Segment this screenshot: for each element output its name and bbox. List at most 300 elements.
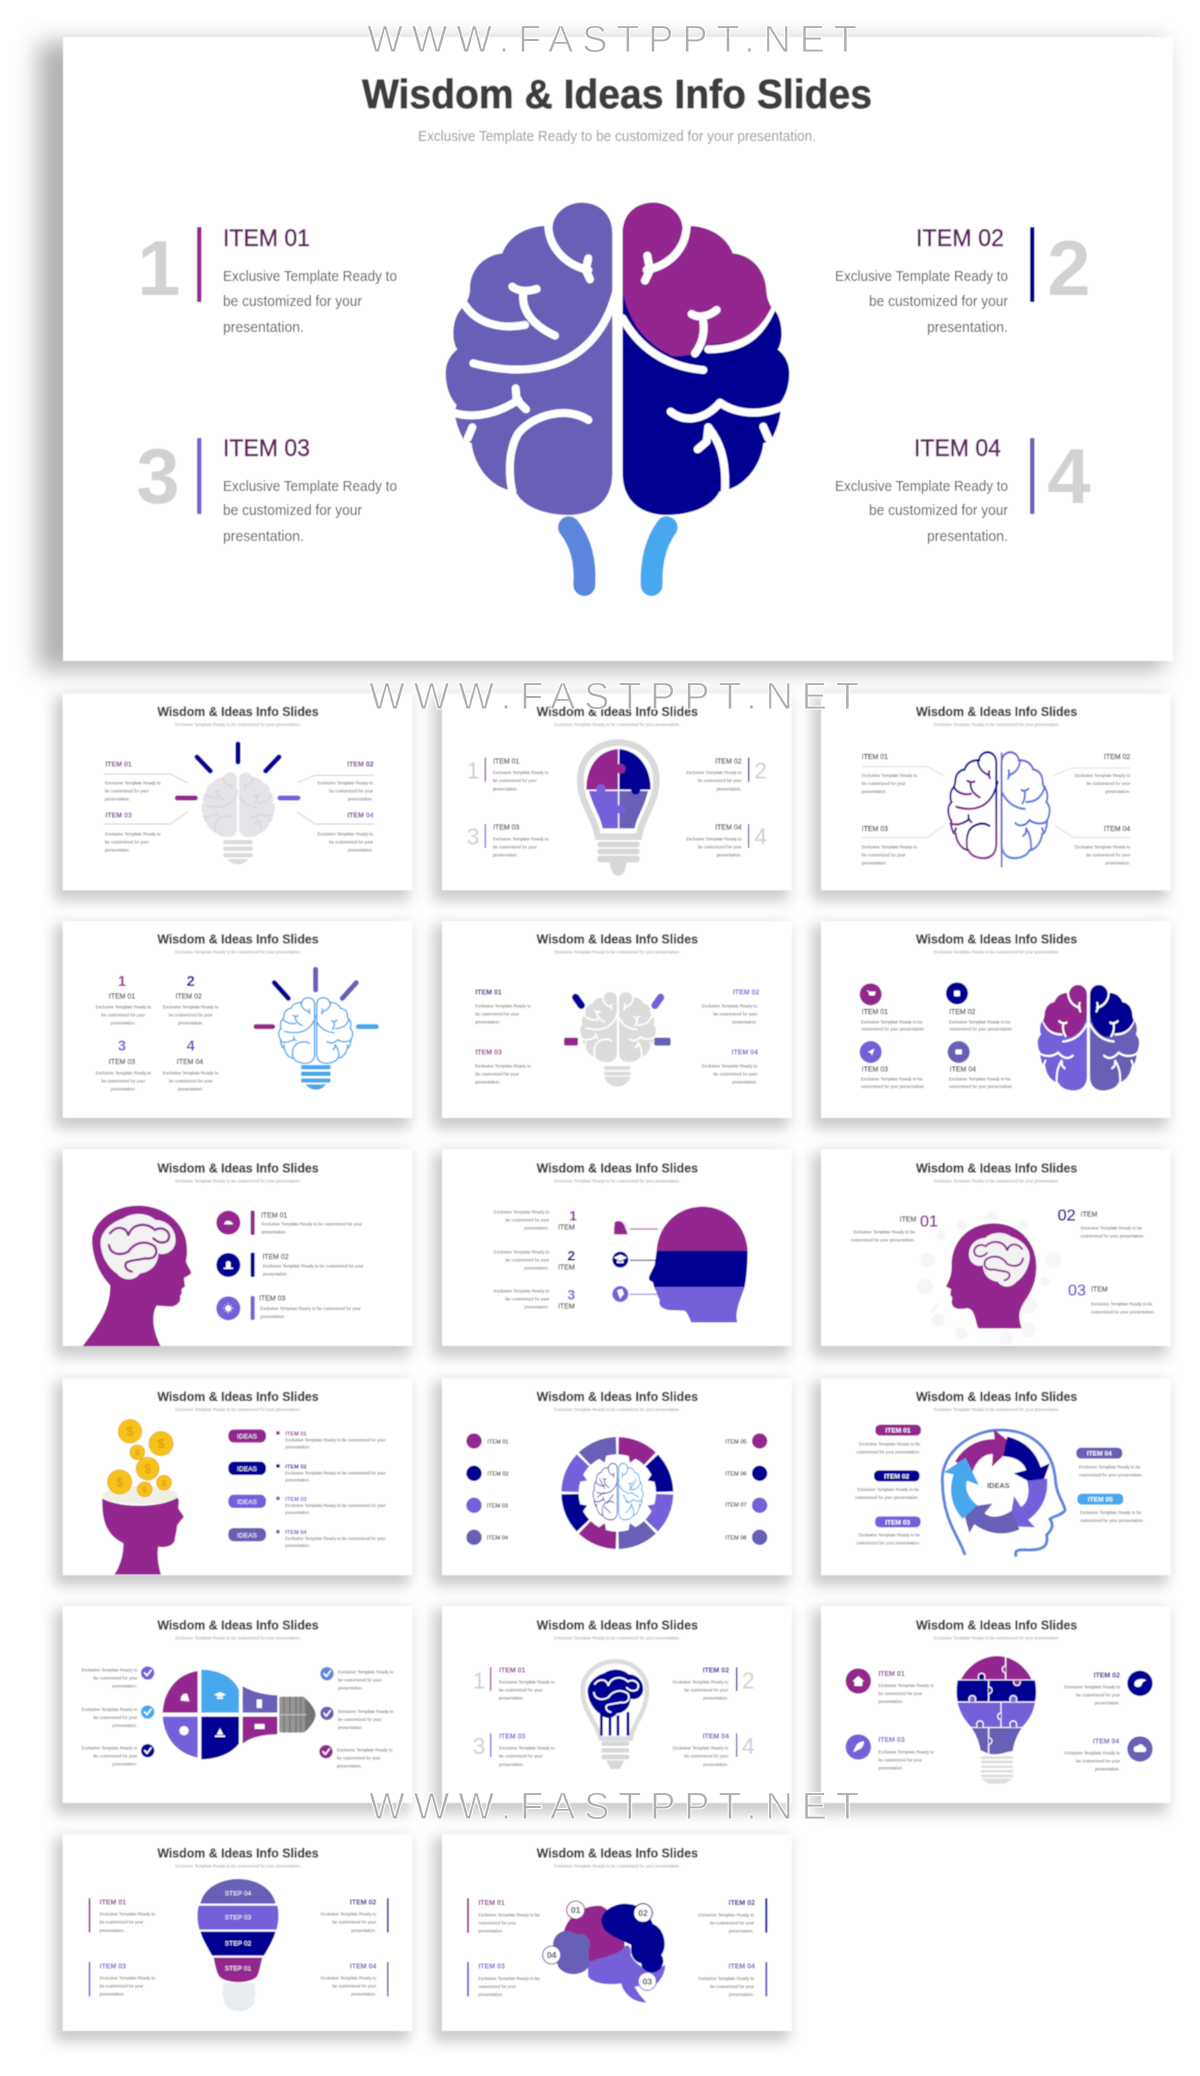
item texts: presentation. <box>100 1991 125 1996</box>
panel: slide 13 sideways bulb: Wisdom & Ideas Info Slides <box>157 1617 319 1632</box>
item 02: ITEM 02 <box>262 1254 289 1261</box>
panel: slide 6 colour brain: Exclusive Template Ready to be customized for your presentation. <box>934 950 1059 955</box>
item texts: be customized for your <box>169 1013 213 1018</box>
item texts: 02 <box>1058 1208 1076 1225</box>
icons and item texts: ITEM 01 <box>862 1009 888 1016</box>
item 03: be customized for your <box>223 503 362 519</box>
item texts: be customized for your <box>100 1983 144 1988</box>
panel: main slide <box>63 37 1173 661</box>
item 02: be customized for your <box>869 294 1008 310</box>
icon: four lobe brain: 03 <box>642 1976 652 1986</box>
item texts: 2 <box>742 1667 755 1693</box>
item texts: 3 <box>118 1039 126 1055</box>
item texts: Exclusive Template Ready to <box>686 770 742 775</box>
item texts: be customized for your <box>862 853 906 858</box>
item texts: ITEM 03 <box>499 1734 526 1741</box>
item texts: Exclusive Template Ready to be <box>853 1230 916 1235</box>
check list left: presentation. <box>112 1684 137 1689</box>
panel: slide 11 ring brain <box>442 1378 792 1575</box>
check list right: be customized for your <box>337 1755 381 1760</box>
item texts: Exclusive Template Ready to <box>686 836 742 841</box>
idea list: presentation. <box>285 1510 310 1515</box>
item 04: Exclusive Template Ready to <box>835 479 1008 495</box>
legend right <box>725 1433 767 1545</box>
item texts: presentation. <box>703 1696 728 1701</box>
icons and item texts: customized for your presentation. <box>949 1027 1013 1032</box>
item list right: customized for your presentation. <box>1080 1518 1144 1523</box>
item texts: be customized for your <box>100 1920 144 1925</box>
item 02 <box>1064 1671 1153 1705</box>
item texts: Exclusive Template Ready to <box>105 780 161 785</box>
item texts: be customized for your <box>685 1687 729 1692</box>
panel: slide 15 puzzle bulb with icons <box>821 1606 1171 1803</box>
item 04: be customized for your <box>869 503 1008 519</box>
item texts: presentation. <box>729 1992 754 1997</box>
item texts: presentation. <box>478 1992 503 1997</box>
item texts: Exclusive Template Ready to <box>321 1912 377 1917</box>
item 03: presentation. <box>878 1765 903 1770</box>
panel: slide 13 sideways bulb <box>63 1606 413 1803</box>
check list left: presentation. <box>112 1723 137 1728</box>
item texts: be customized for your <box>499 1754 543 1759</box>
icon: grey brain with rays <box>564 992 671 1087</box>
item 01: presentation. <box>223 320 304 336</box>
item 01: 1 <box>137 224 181 312</box>
panel: slide 14 circuit brain bulb <box>442 1606 792 1803</box>
item texts: ITEM <box>1081 1211 1098 1218</box>
item texts: ITEM 02 <box>350 1900 376 1907</box>
item 04: 4 <box>1047 432 1091 520</box>
item texts: 3 <box>473 1733 485 1759</box>
item texts: presentation. <box>703 1762 728 1767</box>
idea list: IDEAS <box>237 1434 258 1441</box>
item texts: ITEM <box>558 1303 575 1310</box>
idea list: Exclusive Template Ready to be customized for your <box>285 1536 386 1541</box>
check list left <box>82 1666 154 1767</box>
icon: outline brain <box>948 752 1050 867</box>
item list left: ITEM 02 <box>884 1473 910 1480</box>
item texts: ITEM 01 <box>862 754 888 761</box>
item texts: presentation. <box>717 786 742 791</box>
item texts: Exclusive Template Ready to <box>494 1209 550 1214</box>
item texts: ITEM 04 <box>177 1059 203 1066</box>
item texts: Exclusive Template Ready to <box>862 773 918 778</box>
faint background icons <box>917 1210 1061 1345</box>
icons and item texts: Exclusive Template Ready to be <box>949 1077 1011 1082</box>
check list left: Exclusive Template Ready to <box>82 1746 138 1751</box>
item texts: ITEM 02 <box>715 758 742 765</box>
item 02: presentation. <box>263 1271 288 1276</box>
idea list: presentation. <box>285 1543 310 1548</box>
item texts: be customized for your <box>714 1071 758 1076</box>
item 03: ITEM 03 <box>223 435 310 462</box>
check list right: be customized for your <box>338 1717 382 1722</box>
ring inward pointers <box>580 1455 655 1531</box>
item texts: ITEM 01 <box>499 1668 526 1675</box>
item texts: ITEM <box>900 1217 917 1224</box>
icons and item texts: Exclusive Template Ready to be <box>949 1019 1011 1024</box>
icon: four lobe brain: 02 <box>638 1908 648 1918</box>
panel: slide 16 step bulb <box>63 1834 413 2031</box>
item 03 <box>136 432 397 545</box>
item texts: Exclusive Template Ready to <box>673 1679 729 1684</box>
item 03: Exclusive Template Ready to <box>223 479 397 495</box>
item texts: presentation. <box>348 847 373 852</box>
item texts: ITEM <box>1091 1286 1108 1293</box>
subtitle: Exclusive Template Ready to be customized for your presentation. <box>418 128 816 145</box>
item texts: ITEM 04 <box>715 824 742 831</box>
item texts: ITEM 02 <box>733 989 759 996</box>
item 01: presentation. <box>878 1699 903 1704</box>
item texts: 03 <box>1068 1283 1086 1300</box>
item 01 <box>216 1211 363 1235</box>
item texts: ITEM <box>558 1264 575 1271</box>
icon: stepped light bulb: STEP 03 <box>225 1914 252 1921</box>
item texts: customized for your presentation. <box>851 1238 915 1243</box>
item 01: ITEM 01 <box>223 225 310 252</box>
panel: slide 3 line brain: Exclusive Template Ready to be customized for your presentation. <box>934 722 1059 727</box>
idea list: IDEAS <box>237 1466 258 1473</box>
icon: head with brain <box>946 1223 1036 1328</box>
icon: bulb with circuit brain <box>583 1661 647 1769</box>
idea list: Exclusive Template Ready to be customized for your <box>285 1438 386 1443</box>
item texts: ITEM 04 <box>347 813 374 820</box>
item texts: be customized for your <box>105 839 149 844</box>
item 03: 3 <box>136 432 180 520</box>
check list right <box>319 1667 394 1768</box>
item texts: ITEM 01 <box>493 758 520 765</box>
icon: stepped light bulb: STEP 04 <box>225 1890 252 1897</box>
legend right: ITEM 05 <box>725 1440 747 1446</box>
item texts: be customized for your <box>710 1921 755 1926</box>
panel: slide 10 coins head: Exclusive Template Ready to be customized for your presentation. <box>175 1407 301 1412</box>
item texts: Exclusive Template Ready to <box>100 1975 156 1980</box>
panel: slide 13 sideways bulb: Exclusive Template Ready to be customized for your presentation. <box>175 1635 301 1640</box>
title: Wisdom & Ideas Info Slides <box>362 71 872 117</box>
item 02: Exclusive Template Ready to be customized for your <box>263 1263 364 1268</box>
item texts: Exclusive Template Ready to <box>475 1063 531 1068</box>
panel: slide 5 grey brain: Exclusive Template Ready to be customized for your presentation. <box>554 950 680 955</box>
item texts: Exclusive Template Ready to <box>100 1912 156 1917</box>
item texts: presentation. <box>717 853 742 858</box>
item texts <box>851 1208 1155 1315</box>
item texts: ITEM 04 <box>732 1050 758 1057</box>
item texts <box>475 989 759 1084</box>
legend left: ITEM 04 <box>487 1535 508 1541</box>
item texts: 1 <box>118 974 126 990</box>
item texts: 4 <box>754 823 767 849</box>
item 03: ITEM 03 <box>878 1737 905 1744</box>
icon: open head with coins: $ <box>142 1486 147 1495</box>
icons and item texts: ITEM 04 <box>950 1067 976 1074</box>
item texts: be customized for your <box>475 1011 520 1016</box>
legend right: ITEM 07 <box>725 1502 747 1508</box>
item texts: presentation. <box>111 1087 136 1092</box>
item list left: Exclusive Template Ready to be <box>859 1441 921 1446</box>
item texts: be customized for your <box>333 1920 377 1925</box>
item 02: be customized for your <box>1076 1692 1121 1697</box>
item texts: 4 <box>187 1039 196 1055</box>
item texts: presentation. <box>475 1019 500 1024</box>
item 03 <box>846 1734 934 1770</box>
item texts: presentation. <box>862 789 887 794</box>
item texts: presentation. <box>348 796 373 801</box>
item texts: ITEM 04 <box>703 1734 729 1741</box>
item 02: presentation. <box>1095 1700 1120 1705</box>
item 03: Exclusive Template Ready to be customized for your <box>260 1306 361 1311</box>
check list left: be customized for your <box>94 1715 138 1720</box>
panel: slide 8 striped head <box>442 1149 792 1346</box>
panel: slide 17 brain lobes: Exclusive Template Ready to be customized for your presentation. <box>554 1863 680 1868</box>
panel: slide 11 ring brain: Wisdom & Ideas Info Slides <box>537 1389 698 1404</box>
legend right: ITEM 08 <box>725 1535 747 1541</box>
item texts <box>494 1208 577 1310</box>
item list left: ITEM 03 <box>885 1519 911 1526</box>
icons and item texts: customized for your presentation. <box>861 1084 925 1089</box>
item texts: be customized for your <box>493 778 537 783</box>
item 01: be customized for your <box>223 294 362 310</box>
item texts: be customized for your <box>169 1079 213 1084</box>
item texts: Exclusive Template Ready to be <box>1091 1302 1153 1307</box>
item texts: presentation. <box>1105 789 1130 794</box>
icon: open head with coins <box>102 1420 184 1575</box>
item texts: ITEM 04 <box>1104 826 1130 833</box>
item texts: presentation. <box>862 861 887 866</box>
idea list: ITEM 01 <box>285 1432 307 1438</box>
panel: slide 9 head with faint icons <box>821 1149 1171 1346</box>
item 01: Exclusive Template Ready to be customized for your <box>262 1221 363 1226</box>
item list left: customized for your presentation. <box>856 1449 920 1454</box>
item texts: presentation. <box>729 1929 754 1934</box>
legend left: ITEM 03 <box>487 1503 508 1509</box>
item texts: 2 <box>754 757 767 783</box>
check list right: Exclusive Template Ready to <box>338 1709 394 1714</box>
item texts: Exclusive Template Ready to be <box>1081 1226 1143 1231</box>
item 01: ITEM 01 <box>878 1671 905 1678</box>
icon: outline brain <box>593 1463 643 1520</box>
icon: open head with coins: $ <box>126 1425 134 1439</box>
item texts: be customized for your <box>101 1079 146 1084</box>
item texts: ITEM 04 <box>350 1963 376 1970</box>
panel: slide 1 lit brain bulb: Exclusive Template Ready to be customized for your presentation. <box>175 722 301 727</box>
item texts: Exclusive Template Ready to be <box>478 1976 540 1981</box>
panel: slide 11 ring brain: Exclusive Template Ready to be customized for your presentation. <box>554 1407 680 1412</box>
item texts: be customized for your <box>105 788 149 793</box>
icon: puzzle light bulb <box>580 743 656 876</box>
item texts: be customized for your <box>710 1984 755 1989</box>
item texts: customized for your <box>478 1921 517 1926</box>
panel: slide 8 striped head: Wisdom & Ideas Info Slides <box>537 1160 698 1175</box>
icon: four lobe brain: 01 <box>571 1905 581 1915</box>
check list right: Exclusive Template Ready to <box>337 1747 393 1752</box>
panel: slide 17 brain lobes <box>442 1834 792 2031</box>
item texts: Exclusive Template Ready to <box>494 1250 550 1255</box>
item 01 <box>137 224 397 336</box>
item texts <box>862 754 1131 866</box>
panel: slide 1 lit brain bulb <box>63 693 413 890</box>
item texts: be customized for your <box>329 788 374 793</box>
idea list <box>228 1429 386 1548</box>
item list right: ITEM 04 <box>1087 1451 1112 1458</box>
item 04: ITEM 04 <box>914 435 1001 462</box>
idea list: Exclusive Template Ready to be customized for your <box>285 1471 386 1476</box>
icon: stepped light bulb <box>197 1879 279 2011</box>
item texts: 01 <box>920 1214 938 1231</box>
item 02: presentation. <box>927 320 1008 336</box>
item texts: 2 <box>187 974 195 990</box>
item 01: ITEM 01 <box>261 1212 287 1219</box>
item texts: ITEM 03 <box>100 1963 126 1970</box>
item texts: Exclusive Template Ready to <box>321 1975 377 1980</box>
item texts: presentation. <box>111 1021 136 1026</box>
panel: slide 7 head profile <box>63 1149 413 1346</box>
item texts: be customized for your <box>685 1754 729 1759</box>
item texts: presentation. <box>478 1929 503 1934</box>
item list right: customized for your presentation. <box>1079 1472 1143 1477</box>
panel: slide 5 grey brain: Wisdom & Ideas Info Slides <box>537 932 698 947</box>
leader lines <box>104 774 374 824</box>
icon: stepped light bulb: STEP 02 <box>225 1940 252 1947</box>
item texts <box>473 1667 755 1767</box>
item texts: be customized for your <box>698 844 742 849</box>
item list right <box>1076 1448 1144 1523</box>
panel: slide 12 ideas cycle head <box>821 1378 1171 1575</box>
item texts: Exclusive Template Ready to <box>317 831 374 836</box>
item texts: be customized for your <box>499 1687 543 1692</box>
item 03: Exclusive Template Ready to <box>878 1749 934 1754</box>
item list left: customized for your presentation. <box>855 1495 919 1500</box>
panel: slide 5 grey brain <box>442 921 792 1118</box>
item texts: Exclusive Template Ready to <box>96 1005 152 1010</box>
icons and connectors <box>612 1221 658 1302</box>
item 01: Exclusive Template Ready to <box>223 269 397 285</box>
item texts: Exclusive Template Ready to <box>96 1071 152 1076</box>
item texts: ITEM 03 <box>475 1050 502 1057</box>
legend left: ITEM 02 <box>487 1471 509 1477</box>
icon: jigsaw light bulb <box>957 1656 1036 1784</box>
item texts <box>467 757 767 858</box>
check list left: be customized for your <box>94 1676 138 1681</box>
item texts: ITEM 02 <box>175 993 202 1000</box>
item texts: presentation. <box>100 1928 125 1933</box>
item texts: Exclusive Template Ready to <box>317 780 374 785</box>
item texts: 1 <box>467 757 479 783</box>
icons and item texts: Exclusive Template Ready to be <box>861 1077 923 1082</box>
panel: slide 4 sky brain bulb <box>63 921 413 1118</box>
item texts: Exclusive Template Ready to be <box>478 1913 540 1918</box>
panel: slide 10 coins head: Wisdom & Ideas Info Slides <box>157 1389 319 1404</box>
item texts: ITEM 02 <box>703 1668 729 1675</box>
icon: four colour brain <box>1038 985 1139 1090</box>
panel: slide 2 puzzle bulb <box>442 693 792 890</box>
chart: segmented ring <box>550 1426 684 1560</box>
item texts: ITEM 02 <box>347 762 374 769</box>
item texts: 2 <box>567 1247 575 1263</box>
legend left: ITEM 01 <box>487 1440 509 1446</box>
panel: slide 9 head with faint icons: Exclusive Template Ready to be customized for your presentation. <box>934 1178 1059 1183</box>
item texts: ITEM 01 <box>105 762 132 769</box>
item 02: Exclusive Template Ready to <box>1064 1684 1121 1689</box>
panel: slide 1 lit brain bulb: Wisdom & Ideas Info Slides <box>157 704 319 719</box>
idea list: Exclusive Template Ready to be customized for your <box>285 1503 386 1508</box>
panel: slide 2 puzzle bulb: Wisdom & Ideas Info Slides <box>537 704 698 719</box>
panel: slide 15 puzzle bulb with icons: Exclusive Template Ready to be customized for your presentation. <box>934 1635 1059 1640</box>
check list left: be customized for your <box>94 1754 138 1759</box>
item 01: presentation. <box>262 1229 287 1234</box>
item texts: be customized for your <box>698 778 742 783</box>
panel: slide 12 ideas cycle head: Wisdom & Ideas Info Slides <box>916 1389 1077 1404</box>
item texts: presentation. <box>732 1019 757 1024</box>
item texts: be customized for your <box>101 1013 146 1018</box>
item texts: Exclusive Template Ready to <box>105 831 161 836</box>
item texts: be customized for your <box>475 1071 520 1076</box>
item texts: be customized for your <box>714 1011 758 1016</box>
item texts: ITEM 04 <box>729 1964 755 1971</box>
item 01: Exclusive Template Ready to <box>878 1683 934 1688</box>
item texts: Exclusive Template Ready to <box>698 1976 755 1981</box>
icons and item texts: customized for your presentation. <box>949 1084 1013 1089</box>
item texts: presentation. <box>475 1079 500 1084</box>
leader lines <box>862 767 1130 837</box>
item 02 <box>835 224 1091 336</box>
item texts: Exclusive Template Ready to <box>499 1746 555 1751</box>
item 04 <box>1064 1736 1153 1772</box>
icons and item texts: Exclusive Template Ready to be <box>861 1019 923 1024</box>
item texts: presentation. <box>524 1265 549 1270</box>
item 02: Exclusive Template Ready to <box>835 269 1008 285</box>
item texts: be customized for your <box>506 1296 550 1301</box>
item texts: ITEM 02 <box>1104 754 1130 761</box>
item 03: presentation. <box>223 529 304 545</box>
item texts: ITEM 01 <box>100 1900 126 1907</box>
icon: sky outline brain bulb <box>256 969 376 1090</box>
idea list: presentation. <box>285 1478 310 1483</box>
item 04: presentation. <box>927 529 1008 545</box>
item texts: presentation. <box>524 1304 549 1309</box>
item 03: be customized for your <box>878 1757 923 1762</box>
idea list: presentation. <box>285 1445 310 1450</box>
item texts: presentation. <box>493 853 518 858</box>
item texts: Exclusive Template Ready to <box>862 845 918 850</box>
item texts: ITEM <box>558 1225 575 1232</box>
idea list: ITEM 02 <box>285 1465 307 1471</box>
check list left: Exclusive Template Ready to <box>82 1668 138 1673</box>
item texts: presentation. <box>493 786 518 791</box>
check list right: be customized for your <box>338 1677 382 1682</box>
panel: slide 12 ideas cycle head: Exclusive Template Ready to be customized for your presentation. <box>934 1407 1059 1412</box>
item texts: ITEM 03 <box>105 813 132 820</box>
legend left <box>466 1433 509 1545</box>
legend right: ITEM 06 <box>725 1472 747 1478</box>
check list left: presentation. <box>112 1762 137 1767</box>
item 03: ITEM 03 <box>259 1295 285 1302</box>
item texts: be customized for your <box>1087 781 1131 786</box>
panel: slide 3 line brain: Wisdom & Ideas Info Slides <box>916 704 1077 719</box>
icon: four lobe brain <box>543 1901 665 2002</box>
icon: three band head <box>649 1207 748 1322</box>
item texts: Exclusive Template Ready to <box>493 836 549 841</box>
item texts <box>105 762 374 852</box>
icon: grey brain bulb with rays <box>177 744 298 864</box>
item texts: ITEM 03 <box>478 1964 505 1971</box>
item 04: Exclusive Template Ready to <box>1064 1751 1121 1756</box>
item texts: presentation. <box>178 1021 203 1026</box>
item list right: Exclusive Template Ready to be <box>1079 1464 1141 1469</box>
panel: slide 4 sky brain bulb: Wisdom & Ideas Info Slides <box>157 932 319 947</box>
item texts: Exclusive Template Ready to <box>1075 773 1131 778</box>
item texts <box>89 1898 389 1996</box>
item 04: presentation. <box>1095 1767 1120 1772</box>
